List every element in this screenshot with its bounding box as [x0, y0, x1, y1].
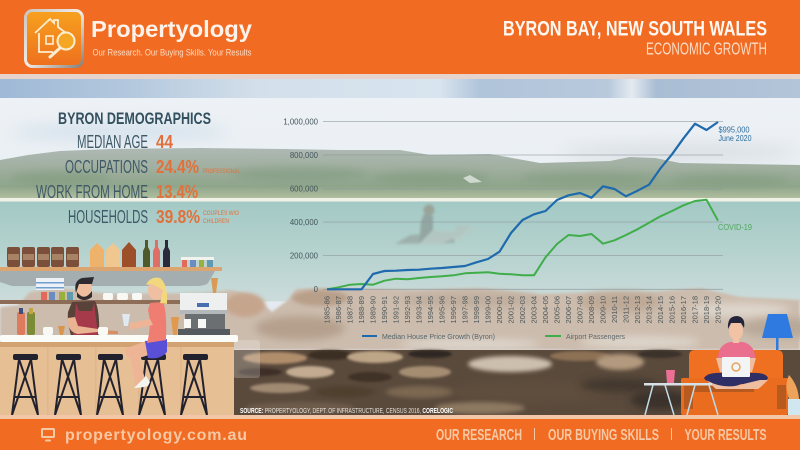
work from home row: 13.4% [156, 182, 198, 202]
cup stack [171, 317, 179, 335]
households row: 39.8% [156, 207, 200, 227]
x axis labels: 1998-99 [472, 296, 481, 324]
x axis labels: 1985-86 [322, 296, 332, 324]
logo tagline: Our Research. Our Buying Skills. Your Results [92, 48, 252, 58]
beach [0, 198, 800, 202]
y axis labels: 0 [314, 285, 319, 294]
translucent panel edge [233, 340, 260, 378]
cups on lower shelf [103, 293, 142, 300]
x axis labels: 2009-10 [598, 296, 608, 324]
occupations row: 24.4% [156, 157, 199, 177]
x axis labels: 1991-92 [392, 296, 400, 324]
x axis labels: 2017-18 [690, 296, 700, 324]
logo wordmark: Propertyology [91, 16, 252, 42]
x axis labels: 2000-01 [495, 296, 504, 324]
x axis labels: 1996-97 [449, 296, 458, 324]
x axis labels: 2015-16 [668, 296, 676, 324]
demographics heading: BYRON DEMOGRAPHICS [58, 109, 211, 128]
distant hills [0, 148, 800, 199]
y axis labels: 400,000 [290, 218, 319, 227]
footer slogan: our research: OUR RESEARCH [436, 427, 522, 444]
legend: airport passengers [545, 332, 625, 341]
coffee jars [7, 247, 79, 267]
x axis labels: 1994-95 [426, 296, 435, 324]
website address: propertyology.com.au [65, 427, 247, 444]
logo icon: house and magnifier [26, 10, 82, 66]
icon: monitor [41, 428, 55, 442]
x axis labels: 1987-88 [346, 296, 354, 324]
x axis labels: 1999-00 [484, 296, 492, 324]
households row: HOUSEHOLDS [68, 207, 148, 227]
counter [0, 335, 238, 415]
canisters [90, 242, 136, 267]
annotation: June 2020 price: June 2020 [718, 134, 752, 143]
x axis labels: 2010-11 [610, 296, 619, 323]
green line: airport passengers [327, 200, 718, 289]
median age row: MEDIAN AGE [77, 132, 148, 152]
blue line: median house price growth [327, 122, 718, 289]
median age row: 44 [156, 132, 173, 152]
seated man [704, 316, 768, 389]
counter cups [43, 326, 65, 335]
x axis labels: 2014-15 [656, 296, 665, 324]
x axis labels: 2013-14 [644, 296, 654, 324]
gridlines [323, 122, 723, 289]
work from home row: WORK FROM HOME [36, 182, 148, 202]
footer bar [0, 415, 800, 450]
y axis labels: 800,000 [290, 151, 319, 160]
x axis labels: 2003-04 [530, 296, 538, 324]
barista [68, 277, 118, 336]
bar stools [12, 354, 208, 415]
x axis labels: 1997-98 [460, 296, 470, 324]
y axis labels [283, 117, 319, 294]
x axis labels: 2004-05 [541, 296, 550, 324]
x axis labels: 2005-06 [552, 296, 562, 324]
x axis labels: 2006-07 [564, 296, 573, 324]
header bar [0, 0, 800, 79]
households row: COUPLES W/O [203, 210, 239, 217]
legend: airport passengers: Airport Passengers [566, 332, 625, 341]
bottles [143, 240, 170, 267]
dark foreground rocks [232, 350, 800, 416]
x axis labels: 1990-91 [380, 296, 389, 324]
sofa [681, 350, 788, 415]
x axis labels: 1986-87 [334, 296, 343, 324]
footer slogan: our buying skills: OUR BUYING SKILLS [548, 427, 659, 444]
x axis labels: 2001-02 [506, 296, 516, 324]
annotation: June 2020 price: $995,000 [718, 126, 750, 134]
x axis labels: 2008-09 [587, 296, 596, 324]
background photo: Byron Bay beach [0, 79, 800, 419]
bottles on back counter [17, 308, 35, 335]
unfaded sky band [0, 79, 800, 98]
legend: median house price: Median House Price Growth (Byron) [382, 332, 495, 341]
faded foreground rocks [0, 288, 800, 350]
x axis labels: 2018-19 [702, 296, 711, 324]
lower shelf [0, 300, 180, 304]
annotation: June 2020 price [718, 126, 752, 143]
x axis labels: 2012-13 [633, 296, 642, 324]
coffee table [644, 370, 718, 415]
x axis labels: 2002-03 [518, 296, 527, 324]
y axis labels: 1,000,000 [283, 117, 319, 126]
occupations row: PROFESSIONAL [203, 168, 240, 175]
occupations row: OCCUPATIONS [65, 157, 148, 177]
x axis labels: 1989-90 [368, 296, 378, 324]
annotation: COVID-19: COVID-19 [718, 223, 752, 232]
panel: Byron demographics [36, 109, 240, 227]
upper shelf [0, 267, 222, 286]
x axis labels: 1988-89 [357, 296, 366, 324]
espresso machine [178, 278, 230, 336]
x axis labels: 2016-17 [679, 296, 688, 324]
households row: CHILDREN [203, 218, 229, 225]
floor lamp [762, 314, 793, 352]
source note: SOURCE: PROPERTYOLOGY, DEPT. OF INFRASTRUCTURE, CENSUS 2016, CORELOGIC [240, 408, 453, 415]
sea [0, 202, 800, 302]
customer [122, 278, 167, 388]
illustration: cafe counter with barista and customer [0, 240, 238, 415]
surfer [395, 204, 478, 244]
potted plant [786, 375, 800, 415]
small jars [181, 257, 214, 267]
x axis labels: 2007-08 [576, 296, 584, 324]
illustration: man with laptop on sofa [644, 314, 800, 415]
x axis labels: 1995-96 [438, 296, 446, 324]
line chart: price growth and airport passengers [283, 117, 752, 341]
x axis labels: 1993-94 [414, 296, 424, 324]
x axis labels [322, 296, 722, 324]
plates and jars on lower shelf [36, 278, 73, 300]
x axis labels: 2019-20 [714, 296, 722, 324]
y axis labels: 200,000 [290, 251, 319, 260]
y axis labels: 600,000 [290, 184, 319, 194]
x axis labels: 2011-12 [622, 296, 630, 323]
x axis labels: 1992-93 [403, 296, 412, 324]
